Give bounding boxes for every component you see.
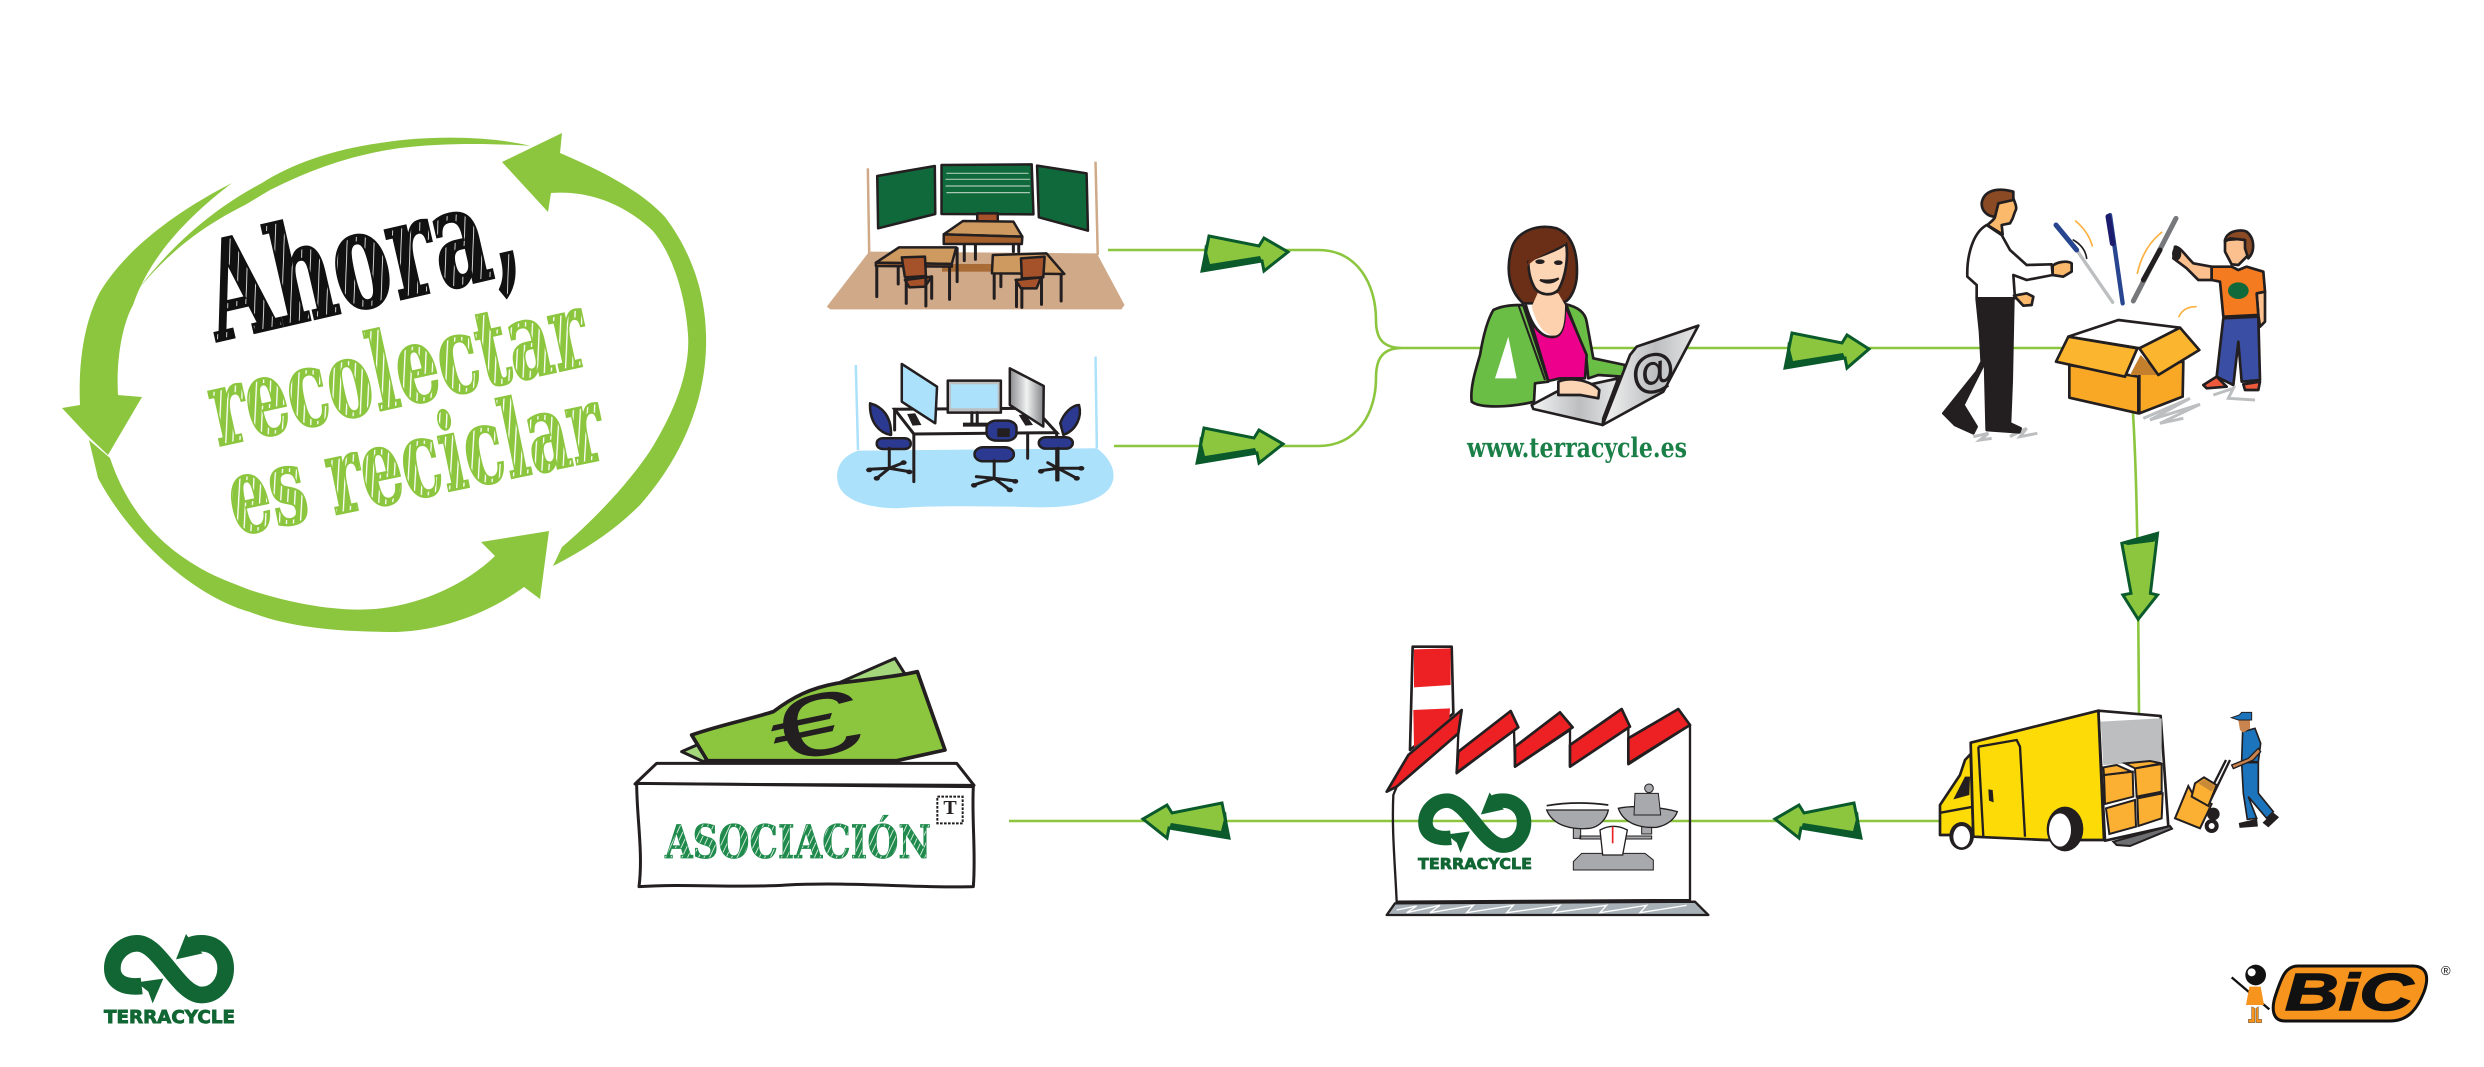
heading: Ahora,: Ahora, (187, 147, 532, 372)
illustration: classroom (827, 162, 1125, 309)
heading: es reciclar: es reciclar (216, 360, 614, 559)
registered mark: ® (2441, 963, 2451, 978)
worker with hand truck (2175, 712, 2278, 833)
heading: recolectar: recolectar (197, 266, 598, 470)
man (1943, 190, 2072, 433)
arrow: truck to factory (1775, 803, 1861, 838)
arrow: website to collection (1785, 333, 1869, 368)
floor shadows (1973, 388, 2255, 440)
illustration: delivery truck (1940, 711, 2278, 851)
association label: ASOCIACIÓN (664, 814, 931, 869)
arrow: factory to association (1143, 803, 1229, 838)
stamp letter: T (943, 797, 957, 819)
illustration: people collecting pens in box (1943, 190, 2265, 440)
euro sign: € (761, 669, 869, 783)
orange badge (2273, 966, 2427, 1021)
TerraCycle logo on factory (1425, 793, 1524, 853)
infinity mark (112, 934, 226, 1003)
arrow: collection to truck (2122, 533, 2158, 619)
box (2056, 320, 2199, 413)
website address: www.terracycle.es (1466, 433, 1687, 464)
at sign on laptop: @ (1625, 340, 1680, 400)
illustration: TerraCycle factory (1387, 647, 1708, 915)
wordmark: TERRACYCLE (104, 1007, 235, 1028)
illustration: woman with laptop (1471, 227, 1698, 425)
connector lines (1009, 250, 2139, 821)
BIC wordmark: BiC (2285, 964, 2415, 1022)
logo: BIC (2232, 963, 2451, 1023)
arrow: classroom to website (1202, 236, 1288, 271)
BIC boy mascot (2232, 965, 2269, 1023)
factory logo wordmark: TERRACYCLE (1418, 855, 1532, 873)
boy (2172, 230, 2265, 390)
illustration: envelope with euro notes (635, 658, 974, 887)
arrow: computer room to website (1197, 428, 1283, 463)
illustration: computer room (837, 357, 1114, 508)
logo: TerraCycle (104, 934, 235, 1028)
flying pens (2056, 215, 2196, 317)
recycling arrows ring (62, 133, 706, 632)
slogan circle with arrows (62, 133, 706, 632)
scales (1547, 784, 1677, 870)
